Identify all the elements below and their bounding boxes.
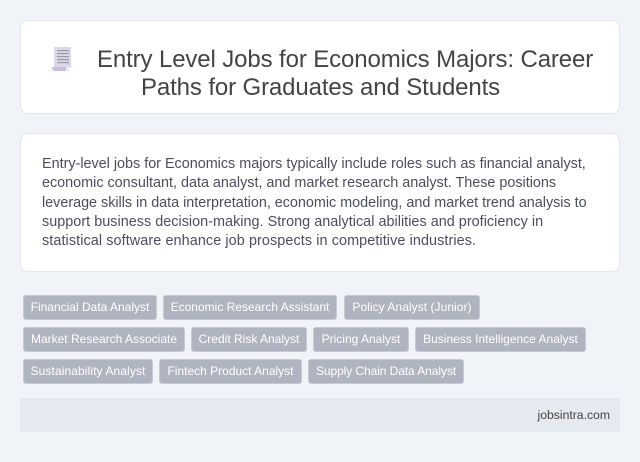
tag: Pricing Analyst [322,332,400,346]
tag [308,359,464,384]
tag [163,295,337,320]
tag list [23,295,586,384]
tag: Credit Risk Analyst [199,332,299,346]
tag: Financial Data Analyst [31,300,149,314]
tag: Fintech Product Analyst [167,364,294,378]
tag [23,359,153,384]
text block: description: Entry-level jobs for Economics majors typically include roles such as financial analyst, [42,156,586,172]
tag: Policy Analyst (Junior) [352,300,472,314]
tag [191,327,307,352]
tag [159,359,302,384]
tag [313,327,409,352]
icon: document [52,47,71,71]
tag: Business Intelligence Analyst [423,332,578,346]
footer bar [20,398,620,432]
panel: title card [20,20,620,114]
panel: description card [20,133,620,272]
text block: description: statistical software enhance job prospects in competitive industries. [42,233,476,249]
tag: Market Research Associate [31,332,177,346]
text block: description: support business decision-making. Strong analytical abilities and proficiency in [42,214,543,230]
title [97,46,593,100]
title: Paths for Graduates and Students [141,74,500,100]
text block: description [42,156,587,249]
tag [23,295,157,320]
tag: Supply Chain Data Analyst [316,364,456,378]
tag [415,327,586,352]
tag [23,327,185,352]
tag: Economic Research Assistant [171,300,329,314]
text block: description: leverage skills in data interpretation, economic modeling, and market trend analysis to [42,195,587,211]
title: Entry Level Jobs for Economics Majors: Career [97,46,593,73]
tag [344,295,480,320]
text block: description: economic consultant, data analyst, and market research analyst. These positions [42,175,556,191]
tag: Sustainability Analyst [31,364,145,378]
footer source: jobsintra.com [538,408,610,422]
